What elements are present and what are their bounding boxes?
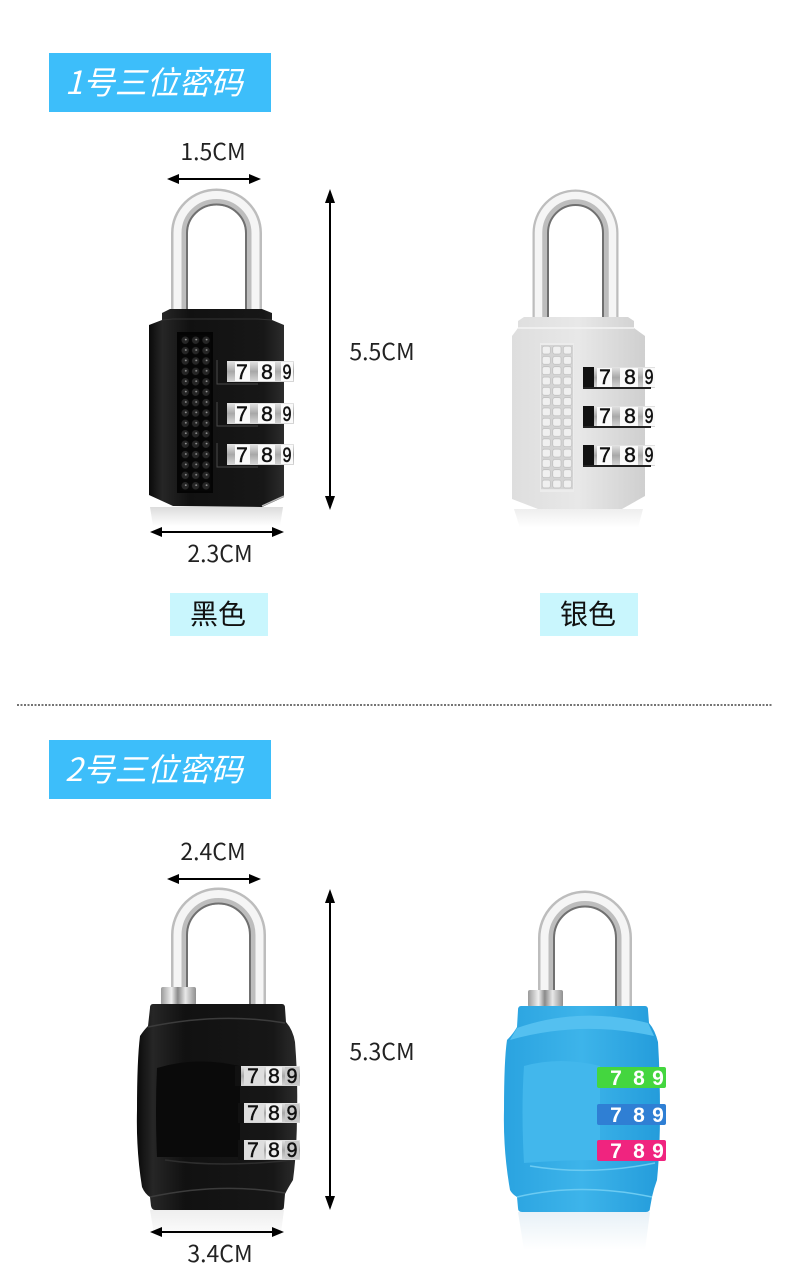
dials: 7 — [236, 403, 248, 426]
dimension: height 5.5CM — [325, 189, 415, 510]
dials: 8 — [268, 1065, 280, 1088]
dials: 7 — [247, 1102, 259, 1125]
dials — [583, 366, 655, 467]
dimension: height 5.3CM — [325, 889, 415, 1210]
dimension: height 5.3CM: 5.3CM — [349, 1033, 415, 1067]
dials: 8 — [261, 444, 273, 467]
dials: 8 — [624, 405, 636, 428]
dimension: body width 2.3CM: 2.3CM — [187, 535, 253, 569]
padlock: black model 2 — [137, 894, 300, 1240]
colour label: black: 黑色 — [190, 593, 246, 633]
padlock: black model 1 — [149, 195, 294, 526]
heading: model 1: 1号三位密码 — [65, 58, 245, 104]
heading: model 2 — [49, 740, 271, 799]
heading: model 2: 2号三位密码 — [65, 745, 245, 791]
dimension: height 5.5CM: 5.5CM — [349, 333, 415, 367]
dials: 8 — [261, 403, 273, 426]
dimension: shackle width 2.4CM: 2.4CM — [180, 833, 246, 867]
dials: 9 — [286, 1065, 298, 1088]
dials: 8 — [633, 1104, 645, 1127]
dials — [217, 360, 294, 467]
dials: 7 — [610, 1104, 622, 1127]
dials: 9 — [644, 366, 654, 389]
dials — [597, 1067, 666, 1163]
dials: 7 — [599, 366, 611, 389]
dials: 8 — [633, 1140, 645, 1163]
dials: 8 — [268, 1102, 280, 1125]
dials: 7 — [599, 444, 611, 467]
padlock: blue model 2 — [504, 897, 666, 1250]
dials: 8 — [261, 361, 273, 384]
dials: 7 — [236, 361, 248, 384]
dials: 9 — [286, 1139, 298, 1162]
dimension: body width 2.3CM — [150, 527, 284, 569]
dials: 9 — [286, 1102, 298, 1125]
dimension: shackle width 2.4CM — [167, 833, 261, 884]
dials: 8 — [624, 366, 636, 389]
dials: 7 — [247, 1065, 259, 1088]
dials: 7 — [236, 444, 248, 467]
dials: 9 — [282, 444, 292, 467]
dials: 9 — [652, 1104, 664, 1127]
dials: 9 — [652, 1067, 664, 1090]
dials: 9 — [652, 1140, 664, 1163]
colour label: silver: 银色 — [560, 593, 616, 633]
dimension: shackle width 1.5CM: 1.5CM — [180, 133, 246, 167]
dimension: body width 3.4CM — [150, 1227, 284, 1269]
dials: 9 — [282, 403, 292, 426]
dials: 7 — [247, 1139, 259, 1162]
dials: 8 — [633, 1067, 645, 1090]
heading: model 1 — [49, 53, 271, 112]
dials: 9 — [644, 405, 654, 428]
dials: 9 — [644, 444, 654, 467]
dials: 7 — [610, 1067, 622, 1090]
dials — [235, 1065, 300, 1162]
dimension: shackle width 1.5CM — [167, 133, 261, 184]
dials: 8 — [268, 1139, 280, 1162]
dimension: body width 3.4CM: 3.4CM — [187, 1235, 253, 1269]
colour label: silver — [540, 593, 638, 636]
dials: 7 — [610, 1140, 622, 1163]
colour label: black — [170, 593, 268, 636]
padlock: silver model 1 — [512, 195, 655, 528]
dials: 9 — [282, 361, 292, 384]
dials: 7 — [599, 405, 611, 428]
dials: 8 — [624, 444, 636, 467]
